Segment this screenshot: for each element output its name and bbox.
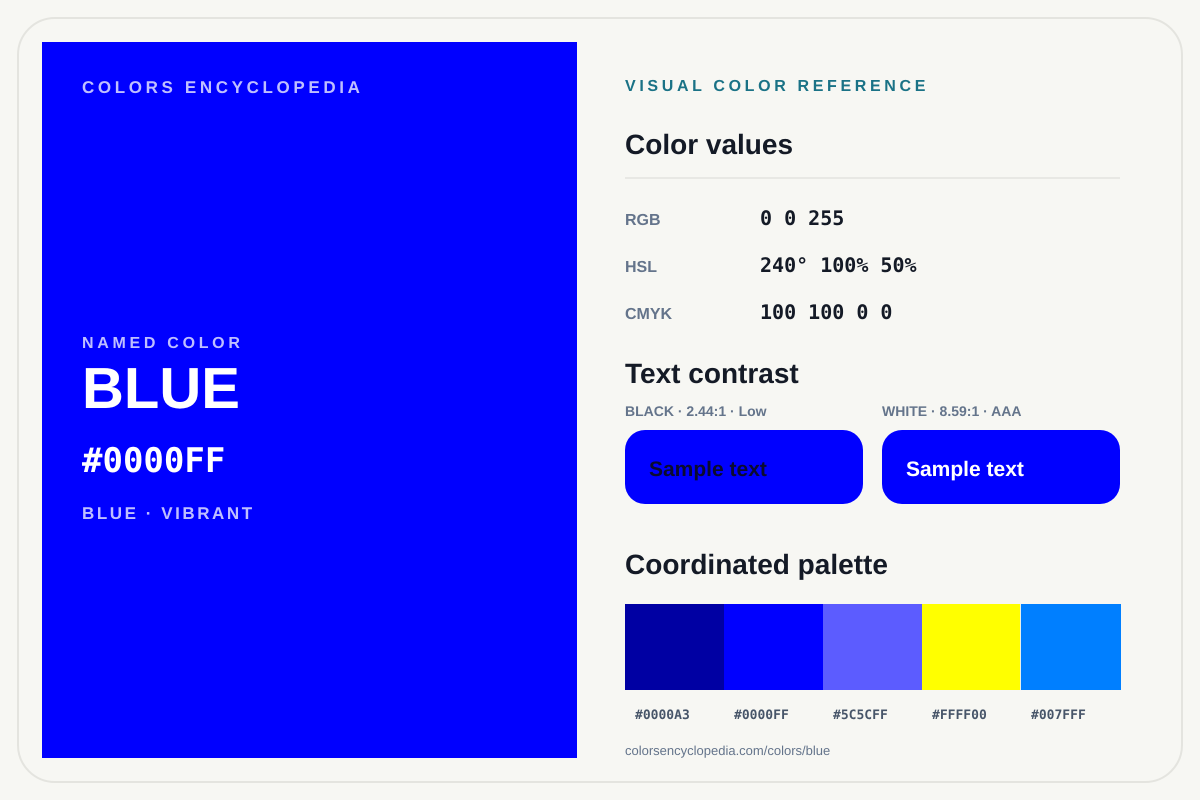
hex label 4: #FFFF00 xyxy=(932,708,987,723)
color name: BLUE xyxy=(82,356,240,421)
row: RGB: 0 0 255 xyxy=(760,206,844,230)
source url: colorsencyclopedia.com/colors/blue xyxy=(625,743,830,758)
contrast sample: white text: Sample text xyxy=(906,458,1024,481)
hex label 5: #007FFF xyxy=(1031,708,1086,723)
heading: color values: Color values xyxy=(625,129,793,160)
row: RGB xyxy=(625,206,844,230)
panel: color values table xyxy=(625,206,917,324)
section eyebrow: VISUAL COLOR REFERENCE xyxy=(625,78,929,95)
swatch: #0000FF xyxy=(724,604,823,690)
heading: coordinated palette: Coordinated palette xyxy=(625,549,888,580)
row: HSL: HSL xyxy=(625,259,657,276)
color family tags: BLUE · VIBRANT xyxy=(82,504,255,523)
brand label: COLORS ENCYCLOPEDIA xyxy=(82,78,364,97)
swatch: #5C5CFF xyxy=(823,604,922,690)
row: HSL: 240° 100% 50% xyxy=(760,253,917,277)
contrast label: black: BLACK · 2.44:1 · Low xyxy=(625,403,767,419)
row: CMYK: CMYK xyxy=(625,306,672,323)
panel: color swatch hero xyxy=(42,42,577,758)
heading: text contrast: Text contrast xyxy=(625,358,799,389)
swatch: #0000A3 xyxy=(625,604,724,690)
palette swatches xyxy=(625,604,1121,690)
swatch: #007FFF xyxy=(1021,604,1121,690)
contrast sample: black text: Sample text xyxy=(649,458,767,481)
row: RGB: RGB xyxy=(625,212,661,229)
palette hex labels xyxy=(635,708,1086,723)
row: CMYK: 100 100 0 0 xyxy=(760,300,892,324)
row: HSL xyxy=(625,253,917,277)
contrast sample: white text xyxy=(882,430,1120,504)
contrast label: white: WHITE · 8.59:1 · AAA xyxy=(882,403,1022,419)
hex label 1: #0000A3 xyxy=(635,708,690,723)
swatch: #FFFF00 xyxy=(922,604,1020,690)
eyebrow: named color: NAMED COLOR xyxy=(82,335,244,352)
hex label 2: #0000FF xyxy=(734,708,789,723)
contrast sample: black text xyxy=(625,430,863,504)
hex code: #0000FF xyxy=(82,441,225,481)
hex label 3: #5C5CFF xyxy=(833,708,888,723)
row: CMYK xyxy=(625,300,892,324)
